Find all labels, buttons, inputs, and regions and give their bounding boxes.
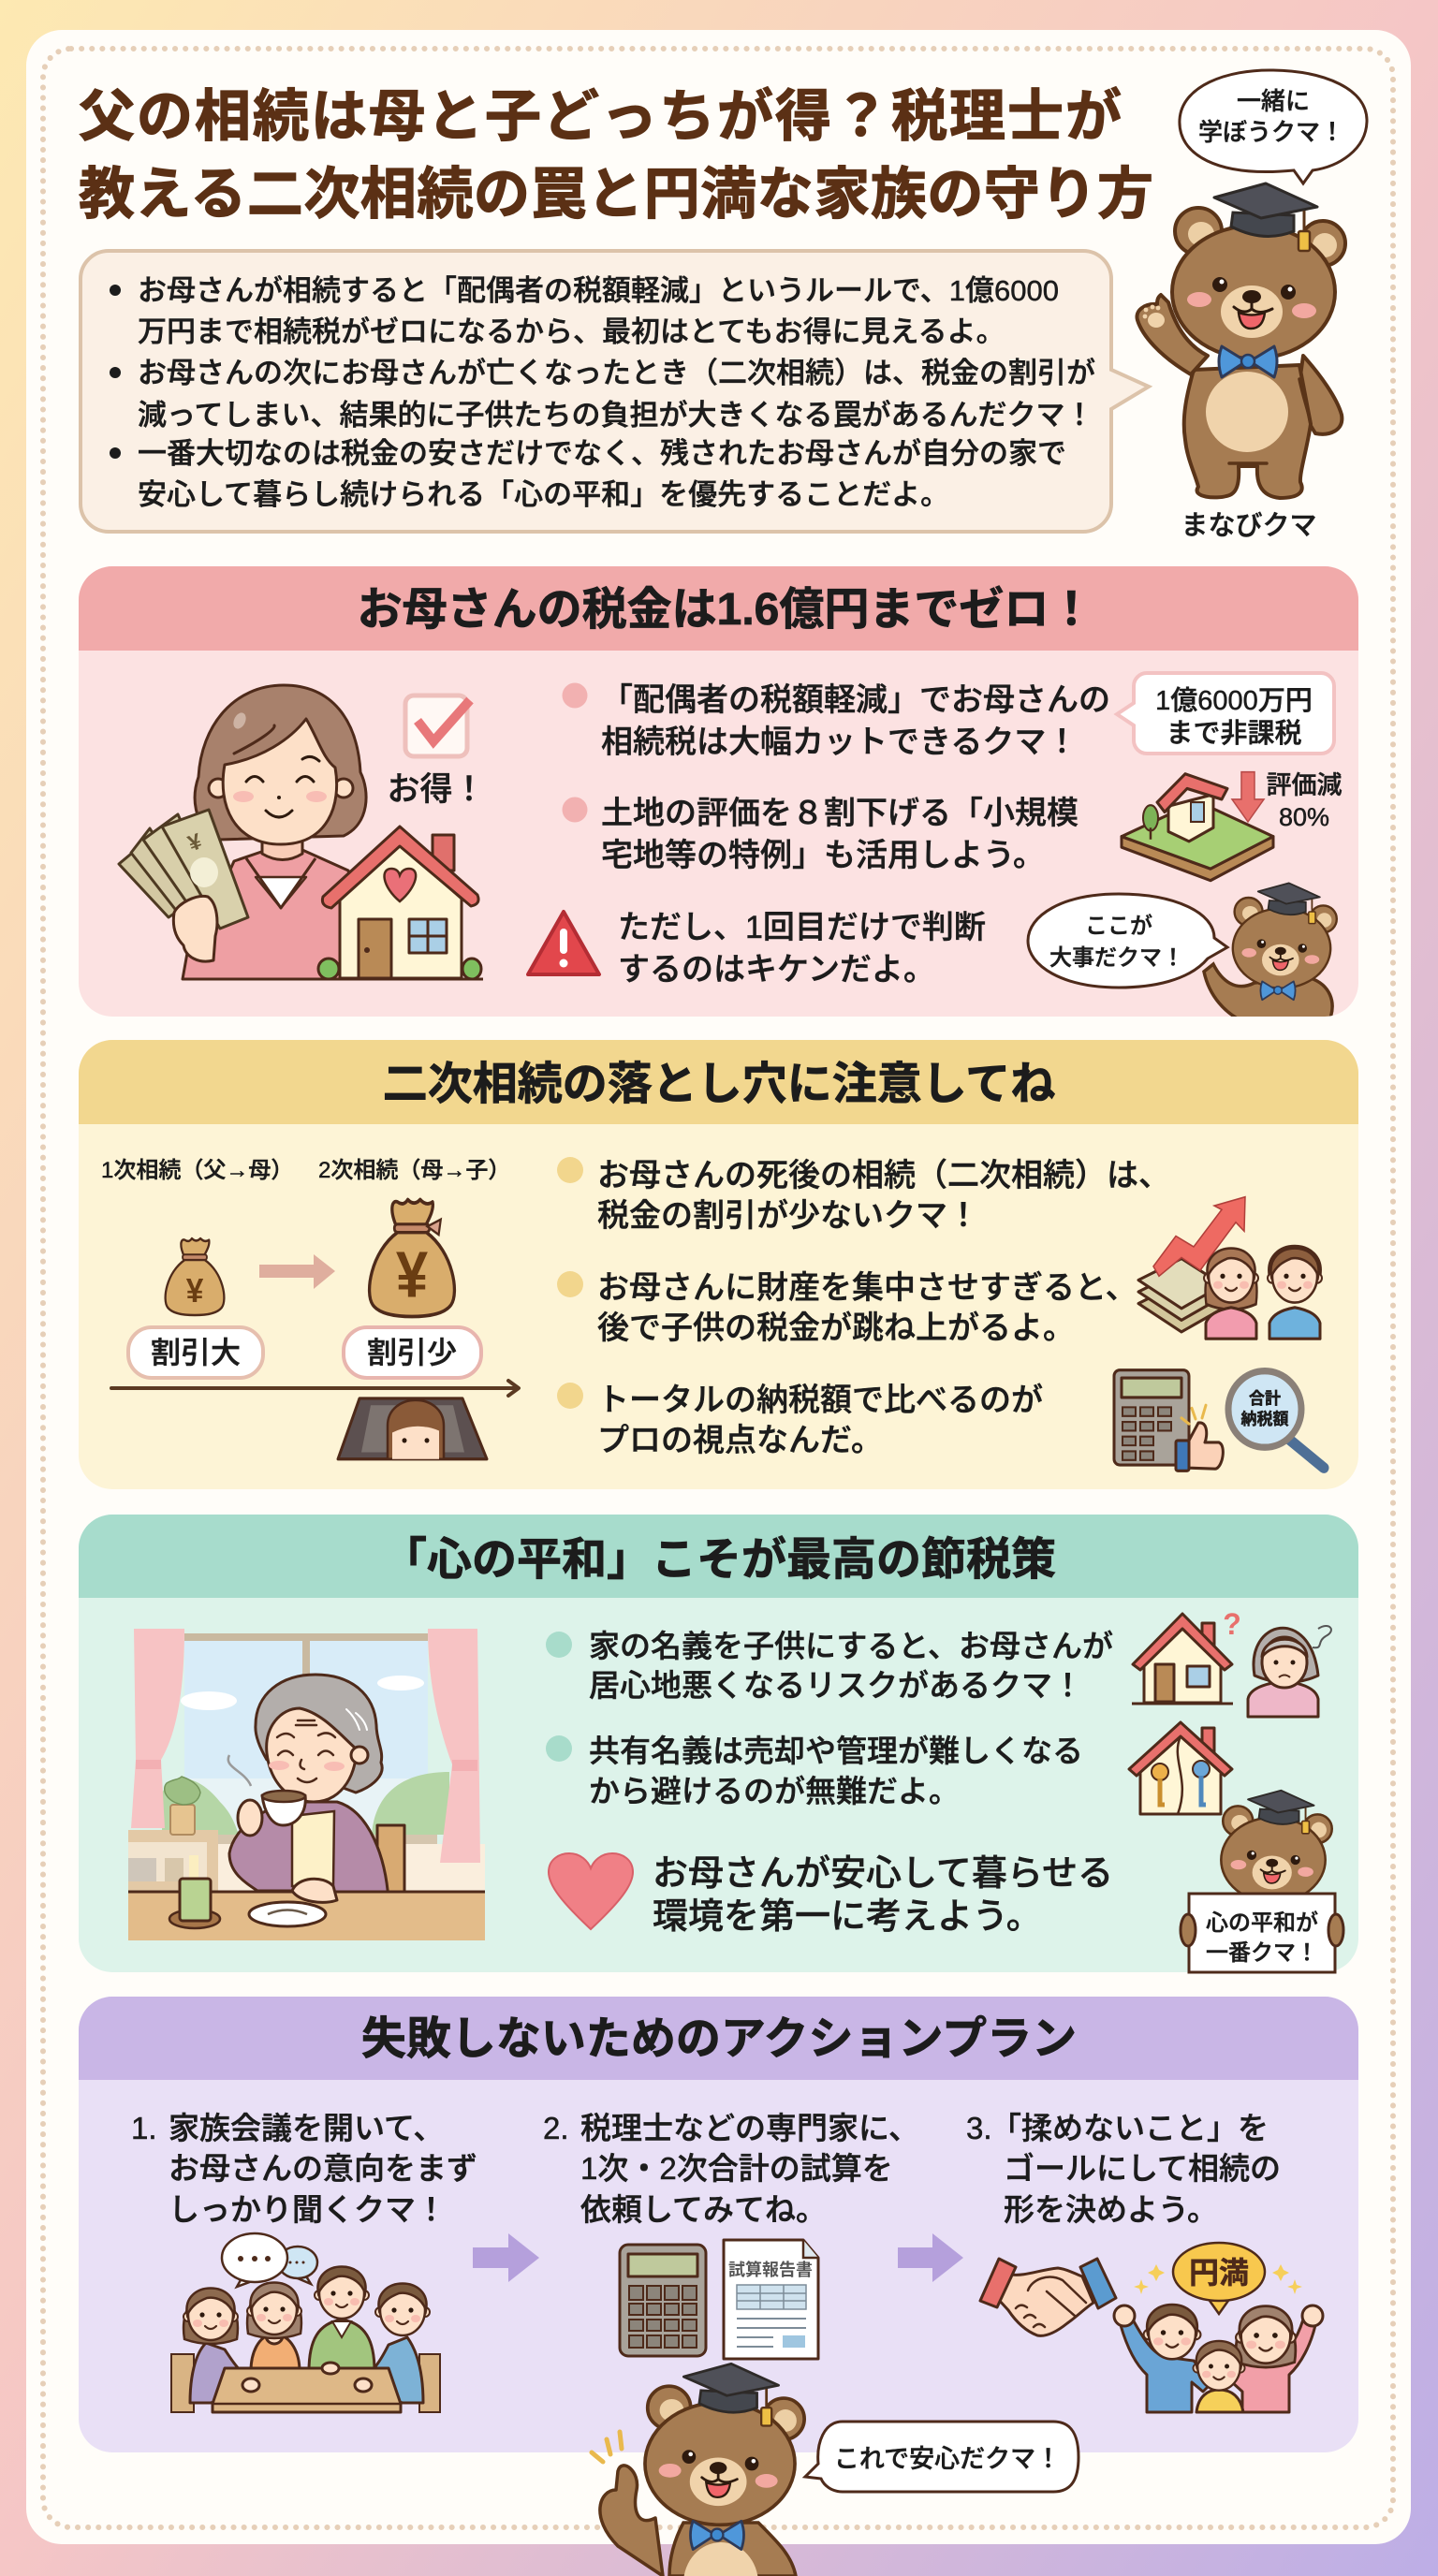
icon: house with heart	[316, 827, 483, 979]
bullet 1	[562, 682, 1110, 760]
icon: calculator	[620, 2245, 706, 2356]
bullet 2	[557, 1270, 1137, 1346]
intro speech bubble: 万円まで相続税がゼロになるから、最初はとてもお得に見えるよ。	[138, 315, 1005, 348]
icon: tax report document	[724, 2240, 818, 2359]
speech bubble: 一緒に学ぼうクマ	[1180, 70, 1367, 183]
panel: お母さんの税金	[79, 566, 1358, 1020]
arrow: step 2 to 3	[898, 2233, 963, 2282]
title: 教える二次相続の罠と円満な家族の守り方	[79, 163, 1153, 226]
icon: warning triangle	[528, 912, 599, 974]
intro speech bubble: 安心して暮らし続けられる「心の平和」を優先することだよ。	[138, 478, 949, 511]
closing message	[653, 1854, 1113, 1937]
icon: rising money and children	[1138, 1197, 1322, 1339]
label: まなびクマ: まなびクマ	[1181, 510, 1317, 541]
closing message: 環境を第一に考えよう。	[653, 1897, 1042, 1937]
bullet 2	[546, 1734, 1083, 1808]
intro speech bubble: お母さんが相続すると「配偶者の税額軽減」というルールで、1億6000	[138, 274, 1059, 307]
title	[79, 85, 1153, 226]
bullet 1: 相続税は大幅カットできるクマ！	[601, 724, 1078, 760]
icon: house on land with 80% reduction: 評価減	[1266, 771, 1343, 799]
speech bubble: これで安心だクマ: これで安心だクマ！	[834, 2445, 1061, 2473]
speech bubble: ここが大事だクマ: 大事だクマ！	[1049, 945, 1184, 971]
bullet 3	[557, 1383, 1043, 1458]
bullet 1	[546, 1629, 1113, 1703]
intro speech bubble: 減ってしまい、結果的に子供たちの負担が大きくなる罠があるんだクマ！	[138, 399, 1093, 432]
icon: large money bag: ¥	[396, 1237, 428, 1310]
speech bubble: 一緒に学ぼうクマ: 一緒に	[1237, 87, 1310, 115]
heading: 失敗しないためのアクションプラン	[361, 2014, 1077, 2064]
sign: 心の平和が一番クマ	[1181, 1894, 1343, 1972]
pill: 割引少: 割引少	[367, 1336, 457, 1369]
arrow: 1次 to 2次	[259, 1254, 335, 1289]
heading: お母さんの税金は1.6億円までゼロ！	[358, 585, 1093, 635]
step 3 text	[966, 2111, 1281, 2227]
icon: calculator, thumbs up and magnifier	[1114, 1370, 1324, 1471]
callout: 1億6000万円まで非課税	[1117, 673, 1334, 754]
icon: house and worried mother	[1132, 1607, 1331, 1717]
pill: 割引少	[344, 1327, 481, 1378]
step 1 text	[131, 2111, 477, 2227]
label: お得: お得！	[387, 771, 486, 808]
bullet 1: 居心地悪くなるリスクがあるクマ！	[589, 1668, 1083, 1703]
step 1 text: 1.	[131, 2111, 157, 2145]
warning text	[618, 910, 986, 988]
sign: 心の平和が一番クマ: 一番クマ！	[1206, 1940, 1318, 1966]
arrow: step 1 to 2	[473, 2233, 539, 2282]
step 2 text: 1次・2次合計の試算を	[580, 2151, 893, 2186]
bullet 3: トータルの納税額で比べるのが	[597, 1383, 1043, 1418]
bullet 2: 後で子供の税金が跳ね上がるよ。	[597, 1310, 1075, 1346]
heading: 「心の平和」こそが最高の節税策	[382, 1535, 1056, 1585]
icon: banknotes: ¥	[184, 828, 206, 856]
bullet 2: お母さんに財産を集中させすぎると、	[597, 1270, 1137, 1306]
callout: 1億6000万円まで非課税: まで非課税	[1166, 718, 1302, 749]
icon: large money bag	[370, 1200, 454, 1316]
icon: calculator, thumbs up and magnifier: 納税額	[1241, 1410, 1289, 1428]
icon: pitfall with person	[338, 1398, 487, 1459]
icon: house and worried mother: ?	[1223, 1607, 1241, 1641]
step 3 text: 「揉めないこと」を	[990, 2111, 1269, 2145]
character: bear with sign	[1181, 1791, 1343, 1972]
speech bubble: ここが大事だクマ	[1028, 894, 1227, 988]
illustration: happy family with 円満 bubble: 円満	[1189, 2256, 1249, 2290]
callout: 1億6000万円まで非課税: 1億6000万円	[1155, 685, 1313, 716]
bullet 1: 家の名義を子供にすると、お母さんが	[589, 1629, 1113, 1663]
character: まなびクマ	[1137, 183, 1345, 498]
icon: small money bag: ¥	[186, 1273, 204, 1310]
icon: calculator, thumbs up and magnifier: 合計	[1249, 1389, 1281, 1408]
icon: tax report document: 試算報告書	[728, 2260, 813, 2279]
step 2 text: 依頼してみてね。	[580, 2192, 827, 2227]
speech bubble: ここが大事だクマ: ここが	[1085, 914, 1152, 939]
step 1 text: お母さんの意向をまず	[169, 2151, 477, 2186]
illustration: family meeting	[171, 2233, 440, 2412]
illustration: woman with money and house	[119, 685, 483, 979]
illustration: grandmother with tea at window	[128, 1629, 485, 1940]
warning text: するのはキケンだよ。	[618, 952, 935, 988]
bullet 2	[562, 796, 1078, 873]
panel: アクションプラン	[79, 1997, 1358, 2452]
label: 2次相続: 2次相続（母→子）	[318, 1158, 510, 1183]
bullet 1: お母さんの死後の相続（二次相続）は、	[597, 1158, 1170, 1193]
icon: checkbox	[405, 695, 470, 756]
bullet 2: 土地の評価を８割下げる「小規模	[601, 796, 1078, 831]
pill: 割引大: 割引大	[151, 1336, 241, 1369]
label: 1次相続: 1次相続（父→母）	[101, 1158, 293, 1183]
bullet 2: 共有名義は売却や管理が難しくなる	[589, 1734, 1083, 1768]
panel: 二次相続の落とし穴	[79, 1040, 1358, 1489]
icon: house on land with 80% reduction: 80%	[1279, 803, 1329, 831]
step 2 text: 2.	[543, 2111, 569, 2145]
icon: small money bag	[166, 1238, 224, 1315]
step 3 text: 形を決めよう。	[1004, 2192, 1218, 2227]
bullet 1	[557, 1157, 1170, 1234]
character: bear thumbs up	[592, 2364, 804, 2576]
intro speech bubble	[81, 251, 1149, 532]
icon: handshake	[980, 2259, 1116, 2335]
bullet 1: 「配偶者の税額軽減」でお母さんの	[601, 682, 1110, 718]
icon: heart	[549, 1853, 633, 1929]
step 3 text: 3.	[966, 2111, 992, 2145]
icon: house with split keys	[1129, 1722, 1232, 1814]
bullet 2: から避けるのが無難だよ。	[589, 1774, 960, 1808]
step 3 text: ゴールにして相続の	[1004, 2151, 1281, 2186]
speech bubble: 一緒に学ぼうクマ: 学ぼうクマ！	[1198, 118, 1344, 146]
pill: 割引大	[128, 1327, 263, 1378]
bullet 2: 宅地等の特例」も活用しよう。	[601, 838, 1045, 873]
step 2 text: 税理士などの専門家に、	[580, 2111, 919, 2145]
intro speech bubble: お母さんの次にお母さんが亡くなったとき（二次相続）は、税金の割引が	[138, 357, 1095, 389]
sign: 心の平和が一番クマ: 心の平和が	[1206, 1910, 1318, 1936]
heading: 二次相続の落とし穴に注意してね	[383, 1060, 1055, 1109]
step 2 text	[543, 2111, 919, 2227]
step 1 text: しっかり聞くクマ！	[169, 2192, 447, 2227]
bullet 3: プロの視点なんだ。	[597, 1423, 883, 1458]
title: 父の相続は母と子どっちが得？税理士が	[79, 85, 1122, 148]
icon: banknotes	[119, 810, 248, 929]
step 1 text: 家族会議を開いて、	[169, 2111, 444, 2145]
speech bubble: これで安心だクマ	[805, 2422, 1078, 2492]
panel: 心の平和	[79, 1515, 1358, 1972]
warning text: ただし、1回目だけで判断	[618, 910, 986, 945]
arrow: timeline	[111, 1381, 519, 1396]
character: bear pointing	[1204, 883, 1337, 1020]
illustration: happy family with 円満 bubble	[1114, 2243, 1323, 2412]
intro speech bubble: 一番大切なのは税金の安さだけでなく、残されたお母さんが自分の家で	[138, 437, 1066, 470]
closing message: お母さんが安心して暮らせる	[653, 1854, 1113, 1894]
bullet 1: 税金の割引が少ないクマ！	[597, 1198, 979, 1234]
icon: house on land with 80% reduction	[1122, 771, 1343, 881]
